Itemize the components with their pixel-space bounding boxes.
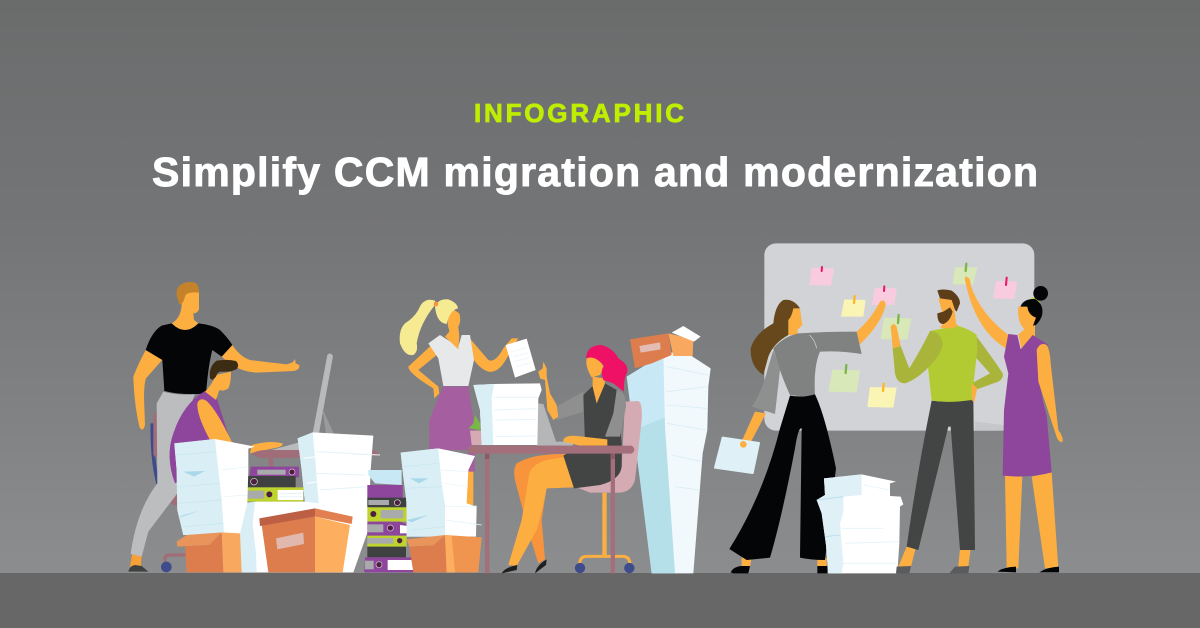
office chair	[152, 412, 188, 572]
whiteboard	[764, 243, 1034, 431]
paper stack front right	[401, 448, 482, 537]
floor	[0, 573, 1200, 628]
cardboard box left	[177, 532, 242, 572]
big paper stack with box	[627, 326, 711, 573]
binders right pile	[364, 470, 414, 572]
woman in grey top and black trousers	[715, 300, 886, 573]
small paper stack	[817, 474, 903, 573]
cardboard box centre	[259, 508, 353, 572]
scene: left group with standing man, seated man, desk and paper stacks	[128, 282, 414, 572]
seated man in purple top	[170, 360, 283, 483]
desk top and leg	[252, 450, 379, 467]
desktop computer monitor	[272, 354, 334, 450]
potted plant	[468, 415, 482, 445]
binders left pile	[241, 467, 303, 502]
standing man in black t-shirt	[128, 282, 299, 572]
paper stack on desk	[473, 383, 542, 445]
scene: paper stack and box in front of the blonde woman	[401, 448, 482, 572]
scene: middle group with standing blonde woman and seated woman at desk	[400, 299, 711, 573]
paper stack front left	[174, 439, 255, 535]
desk	[468, 446, 634, 573]
laptop	[537, 403, 573, 446]
chair	[575, 401, 642, 573]
cardboard box right	[407, 535, 482, 572]
paper stack centre low	[232, 502, 320, 572]
paper stack tall centre	[298, 432, 380, 572]
seated woman with pink hair	[502, 345, 627, 573]
sticky notes	[809, 264, 1017, 408]
blonde woman with paper	[400, 299, 536, 505]
man in green sweater with beard	[891, 289, 1003, 573]
title: Simplify CCM migration and modernization	[152, 149, 1038, 195]
woman in purple dress	[965, 277, 1063, 572]
scene: right group with whiteboard and three people	[715, 243, 1063, 573]
eyebrow label: INFOGRAPHIC	[474, 98, 684, 128]
